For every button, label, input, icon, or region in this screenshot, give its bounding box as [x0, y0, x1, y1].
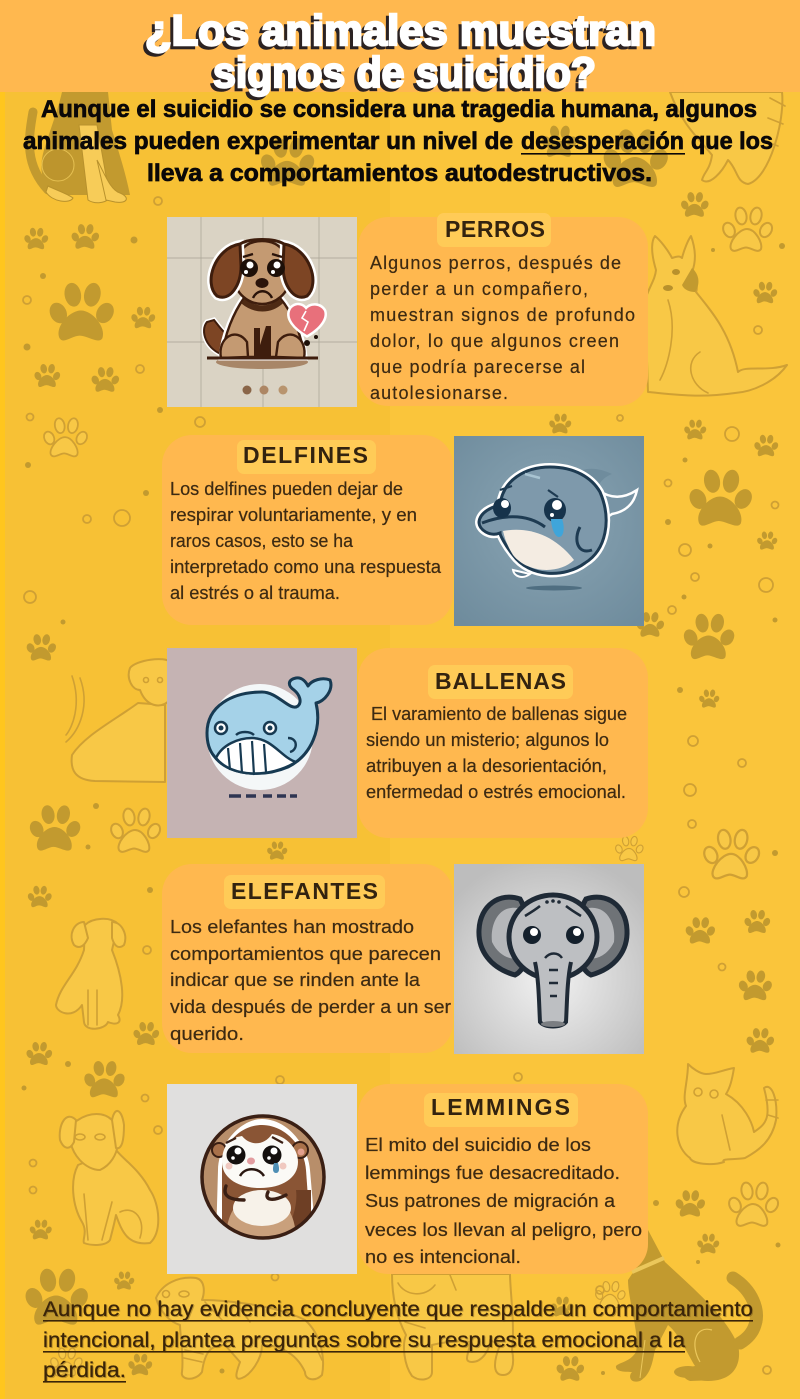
card: delfines text: interpretado como una respuesta: [170, 557, 442, 577]
conclusion text: [43, 1298, 753, 1383]
animal: striped dog bottom center right: [392, 1274, 513, 1379]
header band: [0, 0, 800, 92]
intro text: que los: [691, 128, 773, 155]
panel: elefantes: [162, 864, 644, 1054]
card: elefantes text: querido.: [170, 1024, 244, 1044]
card: lemmings text: LEMMINGS: [431, 1094, 570, 1120]
card: elefantes text: comportamientos que parecen: [170, 944, 441, 964]
card: delfines text: Los delfines pueden dejar de: [170, 479, 403, 499]
card: delfines text: respirar voluntariamente, y en: [170, 505, 417, 525]
card: lemmings text: no es intencional.: [365, 1247, 521, 1267]
card: elefantes text: indicar que se rinden ante la: [170, 970, 421, 990]
card: lemmings text: lemmings fue desacreditado.: [365, 1163, 620, 1183]
conclusion text: intencional, plantea preguntas sobre su respuesta emocional a la: [43, 1329, 685, 1352]
card: elefantes text: [162, 864, 453, 1053]
icon: crying lemming: [167, 1084, 357, 1274]
card: delfines text: raros casos, esto se ha: [170, 531, 354, 551]
title: signos de suicidio?: [213, 49, 596, 97]
animal: cat outline right: [677, 1064, 778, 1164]
card: lemmings text: [358, 1084, 648, 1274]
intro text: [23, 96, 773, 187]
card: ballenas text: siendo un misterio; algunos lo: [366, 730, 609, 750]
animal: sitting dog small left: [56, 919, 125, 1029]
conclusion text: Aunque no hay evidencia concluyente que respalde un comportamiento: [43, 1298, 753, 1321]
card: perros text: perder a un compañero,: [370, 279, 588, 299]
icon: crying dolphin: [454, 436, 644, 626]
card: ballenas text: atribuyen a la desorientación,: [366, 756, 607, 776]
card: ballenas text: BALLENAS: [435, 668, 566, 694]
card: perros text: autolesionarse.: [370, 383, 508, 403]
intro text: Aunque el suicidio se considera una tragedia humana, algunos: [41, 96, 757, 123]
card: elefantes text: ELEFANTES: [231, 878, 378, 904]
panel: perros: [167, 213, 648, 407]
card: delfines text: al estrés o al trauma.: [170, 583, 340, 603]
animal: striped dog bottom center: [156, 1278, 323, 1379]
card: lemmings text: El mito del suicidio de los: [365, 1135, 591, 1155]
card: perros text: dolor, lo que algunos creen: [370, 331, 619, 351]
panel: ballenas: [167, 648, 648, 838]
panel: delfines: [162, 435, 644, 626]
card: perros text: PERROS: [445, 216, 545, 242]
card: lemmings text: Sus patrones de migración a: [365, 1191, 616, 1211]
animal: big sitting dog left: [60, 1111, 158, 1245]
intro text: animales pueden experimentar un nivel de: [23, 128, 513, 155]
icon: sad elephant: [454, 864, 644, 1054]
card: perros text: Algunos perros, después de: [370, 253, 621, 273]
card: perros text: [358, 213, 648, 406]
intro text: lleva a comportamientos autodestructivos.: [147, 160, 652, 187]
title: [145, 7, 656, 97]
animal: solid cat top left: [29, 92, 130, 203]
card: lemmings text: veces los llevan al peligro, pero: [365, 1220, 642, 1240]
card: elefantes text: Los elefantes han mostrado: [170, 917, 414, 937]
card: delfines text: DELFINES: [243, 442, 368, 468]
card: delfines text: [162, 435, 453, 625]
icon: sad dog with broken heart: [167, 217, 357, 407]
animal: striped cat top right: [670, 92, 785, 184]
card: ballenas text: enfermedad o estrés emocional.: [366, 782, 626, 802]
title: ¿Los animales muestran: [145, 7, 656, 55]
card: ballenas text: [358, 648, 648, 838]
icon: sad whale: [167, 648, 357, 838]
card: elefantes text: vida después de perder a un ser: [170, 997, 451, 1017]
animal: sitting cat outline right: [645, 236, 787, 396]
panel: lemmings: [167, 1084, 648, 1274]
card: ballenas text: El varamiento de ballenas sigue: [371, 704, 627, 724]
card: perros text: muestran signos de profundo: [370, 305, 635, 325]
card: perros text: que podría parecerse al: [370, 357, 585, 377]
intro text: desesperación: [521, 128, 684, 155]
animal: big solid cat bottom right: [616, 1230, 756, 1382]
animal: dog outline left: [66, 659, 170, 782]
conclusion text: pérdida.: [43, 1359, 126, 1382]
